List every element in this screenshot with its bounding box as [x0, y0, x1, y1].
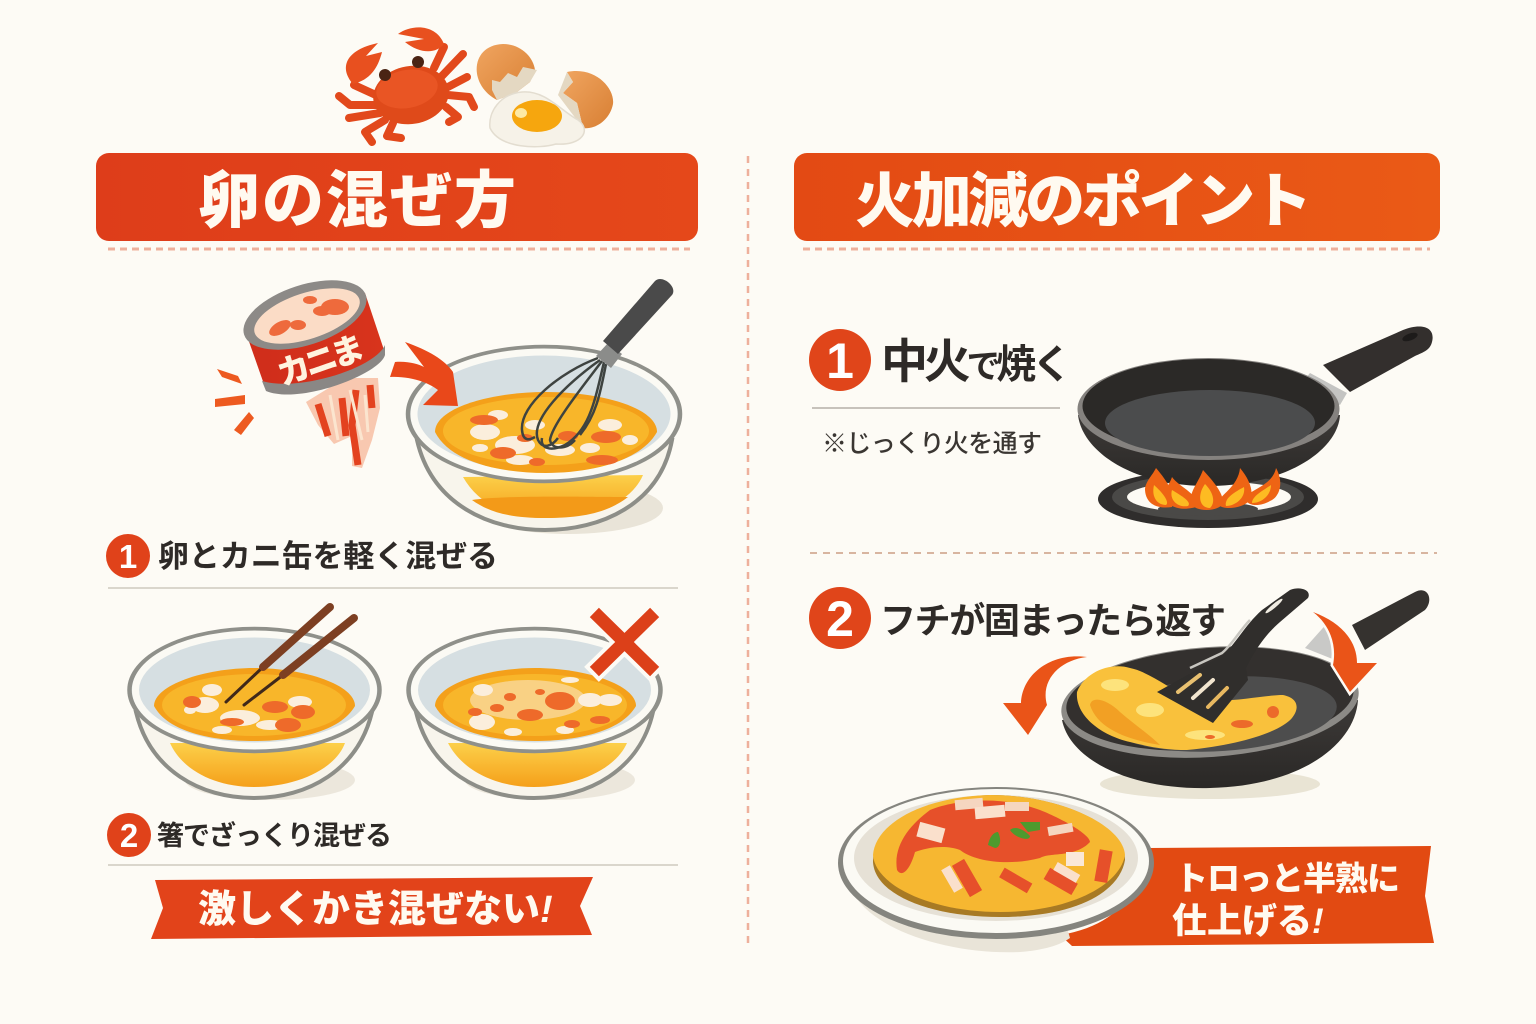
step 1 heading: 中火で焼く	[881, 335, 1072, 388]
step 2 label: 箸でざっくり混ぜる	[157, 820, 392, 851]
warning banner	[151, 877, 593, 939]
icon: finished omelet on plate	[838, 787, 1154, 952]
icon: crab can: カニま	[272, 328, 369, 393]
step 2 heading: 2	[826, 591, 854, 647]
step 2 heading: フチが固まったら返す	[880, 600, 1226, 641]
step 1 label: 卵とカニ缶を軽く混ぜる	[158, 539, 498, 574]
whisk	[522, 279, 673, 449]
icon: cracked eggs	[477, 44, 613, 147]
note: ※じっくり火を通す	[822, 430, 1042, 458]
flames	[1145, 468, 1280, 510]
bowl: overmixing not allowed	[408, 617, 660, 800]
crab flakes	[306, 378, 380, 468]
icon: cross mark	[599, 617, 650, 667]
omelet	[1077, 666, 1297, 750]
heading: heat control	[794, 153, 1440, 241]
step 1 label: 1	[119, 538, 137, 575]
spatula	[1157, 588, 1309, 723]
crab right claw	[398, 27, 444, 51]
step 1 heading	[809, 329, 1072, 391]
chopsticks	[226, 607, 354, 705]
heading: egg mixing	[96, 153, 698, 241]
heading: egg mixing: 卵の混ぜ方	[198, 167, 516, 236]
step 2 label	[107, 813, 392, 857]
icon: flipping omelet	[1003, 588, 1429, 799]
bowl: whisk mixing	[408, 279, 680, 534]
icon: pan on burner	[1078, 326, 1433, 528]
icon: crab can	[215, 267, 385, 468]
finish banner: トロっと半熟に	[1175, 860, 1400, 897]
bowl: chopsticks mixing	[130, 607, 380, 800]
arrow: into bowl	[390, 342, 458, 406]
step 2 label: 2	[120, 817, 138, 854]
step 1 heading: 1	[826, 333, 854, 389]
finish banner	[1060, 846, 1434, 946]
warning banner: 激しくかき混ぜない!	[198, 889, 553, 931]
panel: left column	[96, 153, 698, 939]
finish banner: 仕上げる!	[1172, 902, 1324, 941]
icon: crab	[339, 27, 474, 142]
center divider	[747, 156, 749, 945]
arrow: flip right	[1313, 612, 1377, 692]
heading: heat control: 火加減のポイント	[855, 168, 1312, 235]
step 1 label	[106, 534, 498, 578]
arrow: flip left	[1003, 656, 1087, 735]
crab left claw	[346, 43, 382, 84]
step 2 heading	[809, 587, 1226, 649]
panel: right column	[794, 153, 1440, 952]
